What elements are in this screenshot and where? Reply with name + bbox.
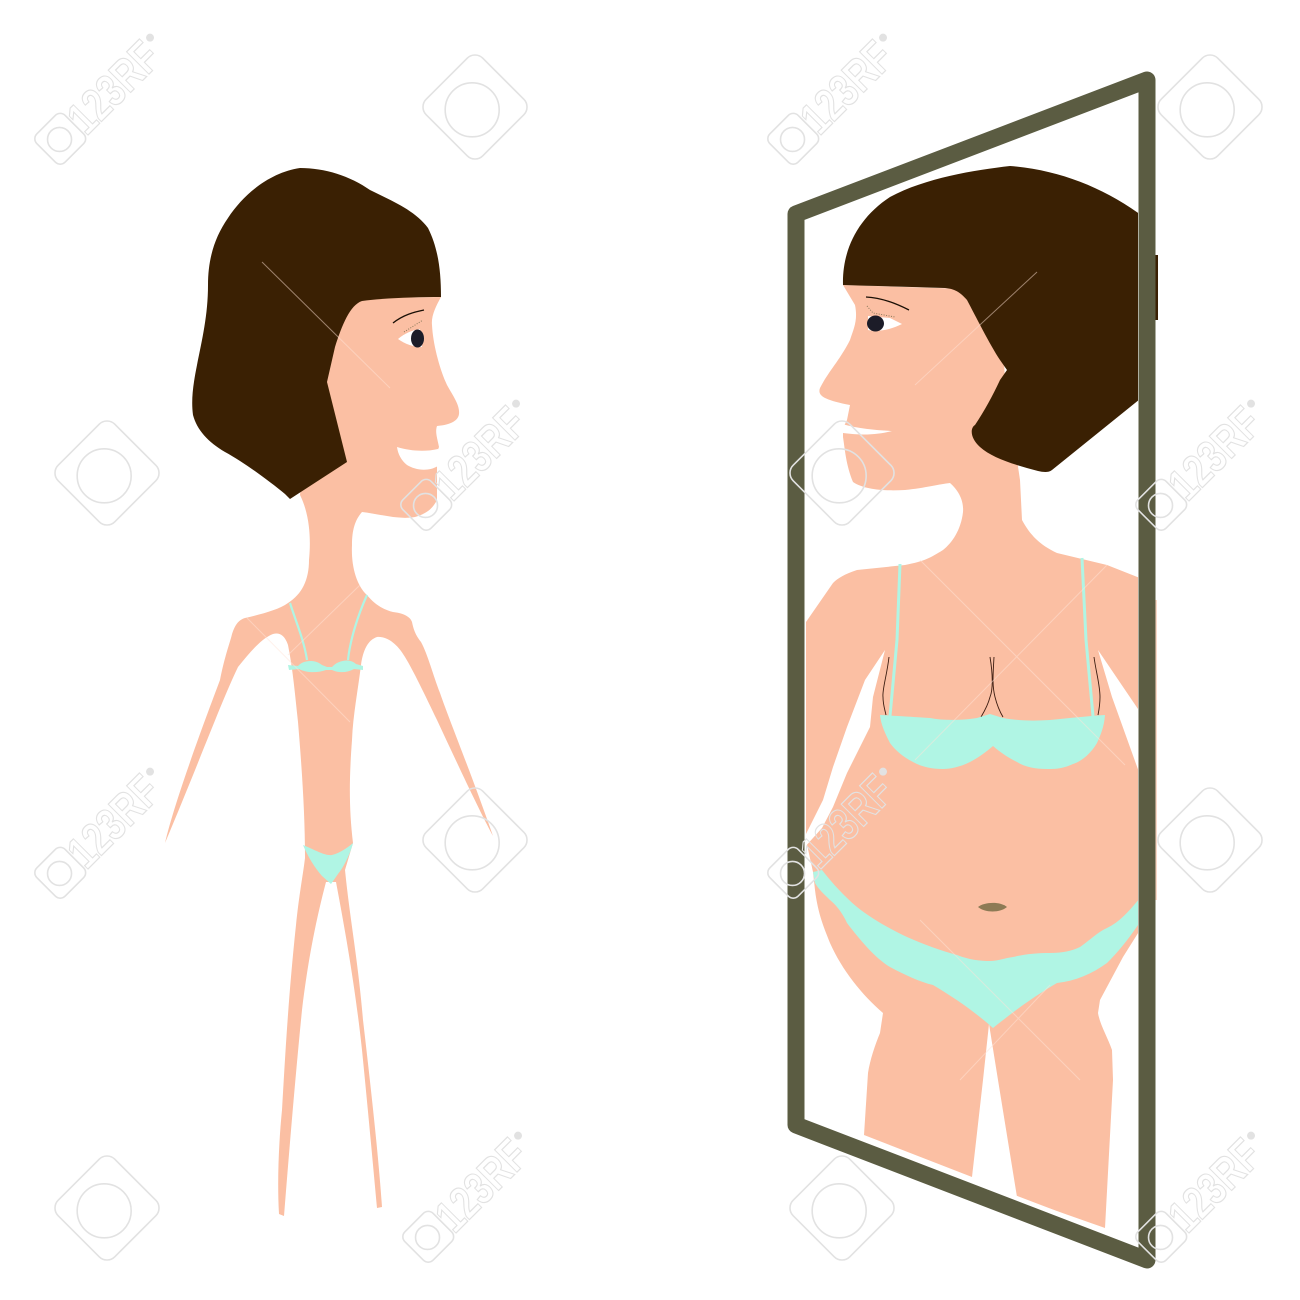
watermark 9 (28, 757, 178, 906)
watermark 10 (418, 783, 532, 897)
skin fold lines (883, 657, 1100, 717)
reflected body and face skin (806, 285, 1140, 1228)
reflected bra cups (880, 714, 1105, 769)
watermark 13 (50, 1151, 164, 1265)
watermark 7 (785, 416, 899, 530)
watermark 16: 123RF (1158, 1129, 1271, 1242)
watermark 1 (28, 23, 178, 172)
watermark 3 (761, 23, 911, 172)
watermark 1: 123RF (57, 31, 170, 144)
watermark 11 (761, 757, 911, 906)
watermark 8: 123RF (1158, 397, 1271, 510)
watermark 6: 123RF (423, 397, 536, 510)
eye (393, 310, 424, 348)
watermark 8 (1129, 389, 1279, 538)
mirror frame (796, 80, 1147, 1260)
watermark 9: 123RF (57, 765, 170, 878)
open smile (397, 447, 438, 470)
watermark 14: 123RF (425, 1129, 538, 1242)
pursed mouth (842, 424, 892, 434)
thin briefs (303, 843, 353, 884)
watermark 3: 123RF (790, 31, 903, 144)
watermark 2 (418, 50, 532, 164)
gap between left arm and belly (804, 650, 885, 848)
reflected eye (866, 297, 909, 332)
thin body and face skin (165, 297, 493, 1216)
hair edge behind mirror frame (1154, 255, 1158, 320)
thin woman figure (165, 168, 493, 1216)
gap between right arm and torso (1098, 650, 1140, 775)
reflected briefs (813, 870, 1140, 1028)
watermark 12 (1153, 783, 1267, 897)
short brown hair (192, 168, 441, 499)
watermark 15 (785, 1151, 899, 1265)
watermark 16 (1129, 1121, 1279, 1270)
reflected short hair (843, 166, 1145, 472)
watermark 6 (394, 389, 544, 538)
thin bra (288, 595, 367, 672)
watermark 14 (396, 1121, 546, 1270)
navel (978, 903, 1007, 912)
mirror reflection (804, 166, 1145, 1228)
skin edge behind mirror frame (1154, 600, 1157, 900)
watermark 4 (1153, 50, 1267, 164)
watermark 11: 123RF (790, 765, 903, 878)
reflected bra straps (890, 558, 1093, 716)
faint diagonal watermark lines (247, 262, 1125, 1080)
watermark 5 (50, 416, 164, 530)
